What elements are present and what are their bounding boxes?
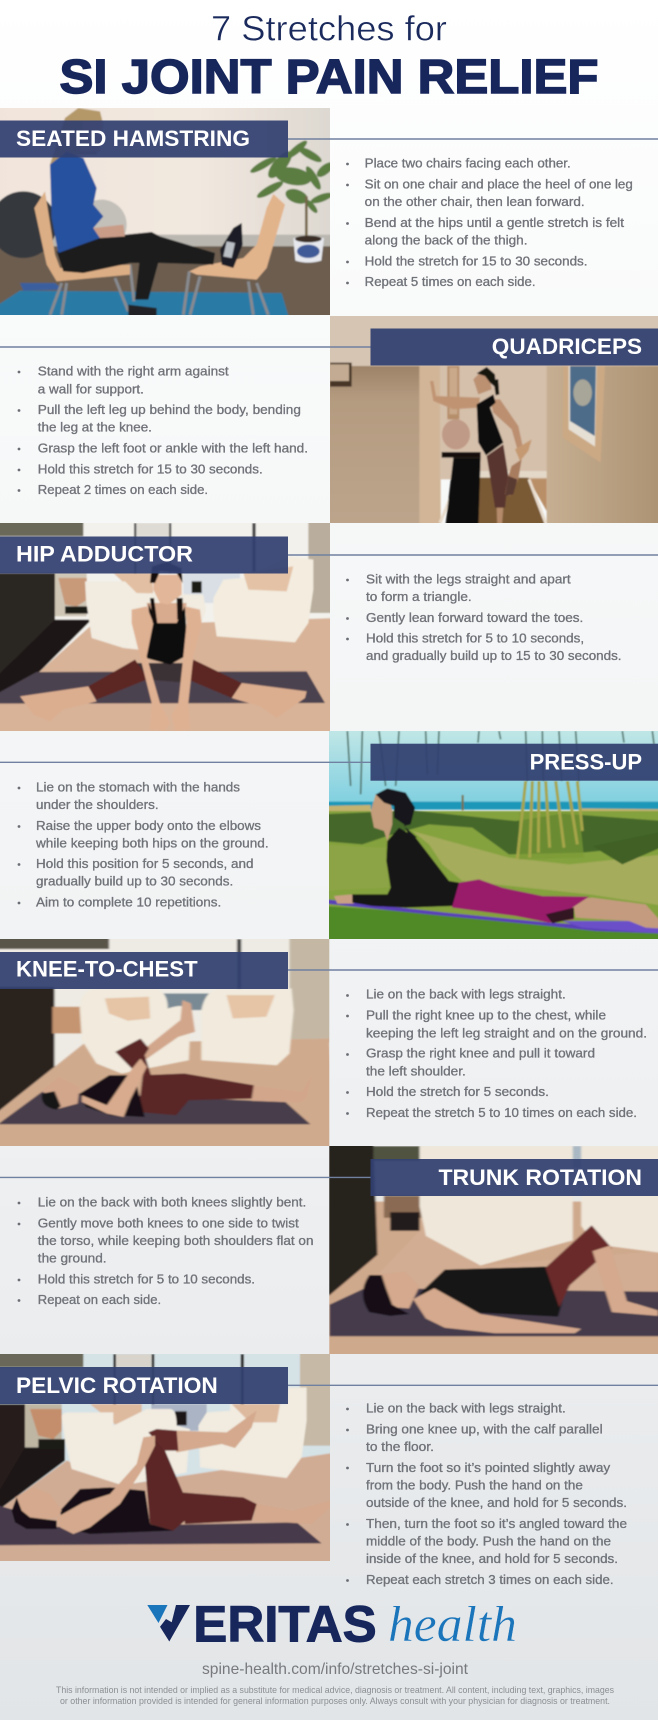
text: seated hamstring steps: on the other chair, then lean forward. bbox=[365, 195, 585, 209]
text: hip adductor steps: Hold this stretch for 5 to 10 seconds, bbox=[366, 632, 584, 646]
text: seated hamstring steps: Repeat 5 times on each side. bbox=[365, 275, 536, 289]
text: press-up steps bbox=[18, 780, 269, 909]
text: hip adductor steps: to form a triangle. bbox=[366, 590, 472, 604]
wordmark: health: health bbox=[388, 1597, 517, 1653]
text: pelvic rotation steps: from the body. Push the hand on the bbox=[366, 1479, 583, 1493]
text: trunk rotation steps bbox=[18, 1196, 313, 1307]
text: quadriceps steps: the leg at the knee. bbox=[38, 421, 152, 435]
text: seated hamstring steps: Place two chairs facing each other. bbox=[365, 156, 571, 170]
text: knee-to-chest steps: Repeat the stretch 5 to 10 times on each side. bbox=[366, 1106, 637, 1120]
banner: knee-to-chest bbox=[0, 952, 288, 989]
panel: hip adductor bbox=[0, 516, 658, 738]
text: trunk rotation steps: Lie on the back with both knees slightly bent. bbox=[38, 1196, 306, 1210]
text: knee-to-chest steps: the left shoulder. bbox=[366, 1065, 466, 1079]
text: trunk rotation steps: the ground. bbox=[38, 1252, 107, 1266]
text: hip adductor steps: Sit with the legs straight and apart bbox=[366, 572, 571, 586]
banner: seated hamstring bbox=[0, 120, 288, 158]
panel: press-up bbox=[0, 724, 658, 946]
photo: trunk rotation bbox=[329, 1146, 658, 1354]
panel: quadriceps bbox=[0, 309, 658, 530]
text: press-up steps: under the shoulders. bbox=[36, 798, 159, 812]
text: quadriceps steps: a wall for support. bbox=[38, 382, 144, 396]
text: trunk rotation steps: Hold this stretch for 5 to 10 seconds. bbox=[38, 1272, 255, 1286]
text: trunk rotation steps: the torso, while keeping both shoulders flat on bbox=[38, 1234, 314, 1248]
banner: hip adductor bbox=[0, 536, 288, 574]
text: quadriceps steps bbox=[18, 364, 308, 497]
heading: press-up: PRESS-UP bbox=[530, 749, 642, 774]
text: pelvic rotation steps: outside of the knee, and hold for 5 seconds. bbox=[366, 1496, 627, 1510]
photo: knee-to-chest bbox=[0, 939, 330, 1146]
text: hip adductor steps: Gently lean forward toward the toes. bbox=[366, 611, 583, 625]
text: pelvic rotation steps: middle of the body. Push the hand on the bbox=[366, 1534, 611, 1548]
text: quadriceps steps: Grasp the left foot or ankle with the left hand. bbox=[38, 441, 308, 455]
disclaimer: This information is not intended or implied as a substitute for medical advice, diagnosis or treatment. All content, including text, graphics, images bbox=[56, 1685, 614, 1695]
text: press-up steps: Aim to complete 10 repetitions. bbox=[36, 895, 221, 909]
photo: seated hamstring bbox=[0, 108, 330, 315]
heading: seated hamstring: SEATED HAMSTRING bbox=[16, 126, 250, 151]
text: press-up steps: while keeping both hips on the ground. bbox=[35, 836, 269, 850]
text: press-up steps: Lie on the stomach with the hands bbox=[36, 780, 240, 794]
text: pelvic rotation steps: Lie on the back with legs straight. bbox=[366, 1402, 566, 1416]
text: quadriceps steps: Hold this stretch for 15 to 30 seconds. bbox=[38, 462, 263, 476]
banner: press-up bbox=[370, 744, 658, 781]
text: seated hamstring steps: Hold the stretch for 15 to 30 seconds. bbox=[365, 254, 588, 268]
icon: logo check mark bbox=[147, 1605, 190, 1642]
photo: pelvic rotation bbox=[0, 1354, 330, 1561]
heading: knee-to-chest: KNEE-TO-CHEST bbox=[16, 957, 198, 982]
text: pelvic rotation steps: Bring one knee up, with the calf parallel bbox=[366, 1423, 603, 1437]
text: hip adductor steps bbox=[346, 572, 622, 663]
banner: quadriceps bbox=[370, 328, 658, 366]
text: seated hamstring steps: Bend at the hips until a gentle stretch is felt bbox=[365, 216, 625, 230]
panel: pelvic rotation bbox=[0, 1347, 658, 1587]
disclaimer: or other information provided is intended for general information purposes only. Always consult with your physician for diagnosis or treatment. bbox=[60, 1696, 610, 1706]
banner: trunk rotation bbox=[370, 1159, 658, 1196]
panel: knee-to-chest bbox=[0, 932, 658, 1153]
panel: trunk rotation bbox=[0, 1139, 658, 1361]
panel: seated hamstring bbox=[0, 101, 658, 323]
text: hip adductor steps: and gradually build up to 15 to 30 seconds. bbox=[366, 649, 622, 663]
title line 1: 7 Stretches for bbox=[211, 10, 447, 48]
text: knee-to-chest steps: Pull the right knee up to the chest, while bbox=[366, 1008, 606, 1022]
text: knee-to-chest steps: keeping the left leg straight and on the ground. bbox=[366, 1026, 647, 1040]
heading: quadriceps: QUADRICEPS bbox=[492, 334, 642, 359]
title line 2: SI JOINT PAIN RELIEF bbox=[60, 50, 598, 104]
text: seated hamstring steps bbox=[346, 156, 633, 289]
photo: press-up bbox=[329, 731, 658, 939]
source url: spine-health.com/info/stretches-si-joint bbox=[202, 1661, 469, 1678]
text: knee-to-chest steps: Grasp the right knee and pull it toward bbox=[366, 1047, 595, 1061]
title bbox=[60, 10, 598, 104]
text: quadriceps steps: Pull the left leg up behind the body, bending bbox=[38, 403, 301, 417]
text: seated hamstring steps: Sit on one chair and place the heel of one leg bbox=[365, 178, 633, 192]
text: knee-to-chest steps: Hold the stretch for 5 seconds. bbox=[366, 1085, 549, 1099]
text: quadriceps steps: Stand with the right arm against bbox=[38, 364, 229, 378]
text: knee-to-chest steps bbox=[346, 988, 647, 1120]
text: knee-to-chest steps: Lie on the back with legs straight. bbox=[366, 988, 566, 1002]
text: press-up steps: Raise the upper body onto the elbows bbox=[36, 819, 261, 833]
heading: hip adductor: HIP ADDUCTOR bbox=[16, 542, 193, 567]
text: pelvic rotation steps: Turn the foot so it’s pointed slightly away bbox=[366, 1461, 611, 1475]
text: quadriceps steps: Repeat 2 times on each side. bbox=[38, 483, 208, 497]
photo: hip adductor bbox=[0, 523, 330, 731]
banner: pelvic rotation bbox=[0, 1367, 288, 1404]
text: seated hamstring steps: along the back of the thigh. bbox=[365, 233, 528, 247]
text: pelvic rotation steps: to the floor. bbox=[366, 1440, 434, 1454]
text: press-up steps: gradually build up to 30 seconds. bbox=[36, 875, 233, 889]
heading: trunk rotation: TRUNK ROTATION bbox=[438, 1165, 642, 1190]
text: pelvic rotation steps: Repeat each stretch 3 times on each side. bbox=[366, 1573, 614, 1587]
text: pelvic rotation steps: Then, turn the foot so it’s angled toward the bbox=[366, 1517, 627, 1531]
wordmark: ERITAS bbox=[193, 1596, 377, 1653]
text: trunk rotation steps: Gently move both knees to one side to twist bbox=[38, 1217, 299, 1231]
disclaimer bbox=[56, 1685, 614, 1706]
text: pelvic rotation steps: inside of the knee, and hold for 5 seconds. bbox=[366, 1552, 618, 1566]
text: pelvic rotation steps bbox=[346, 1402, 627, 1587]
text: trunk rotation steps: Repeat on each side. bbox=[38, 1293, 161, 1307]
heading: pelvic rotation: PELVIC ROTATION bbox=[16, 1373, 218, 1398]
text: press-up steps: Hold this position for 5 seconds, and bbox=[36, 857, 254, 871]
logo: Veritas Health bbox=[147, 1596, 517, 1653]
photo: quadriceps bbox=[330, 316, 658, 523]
